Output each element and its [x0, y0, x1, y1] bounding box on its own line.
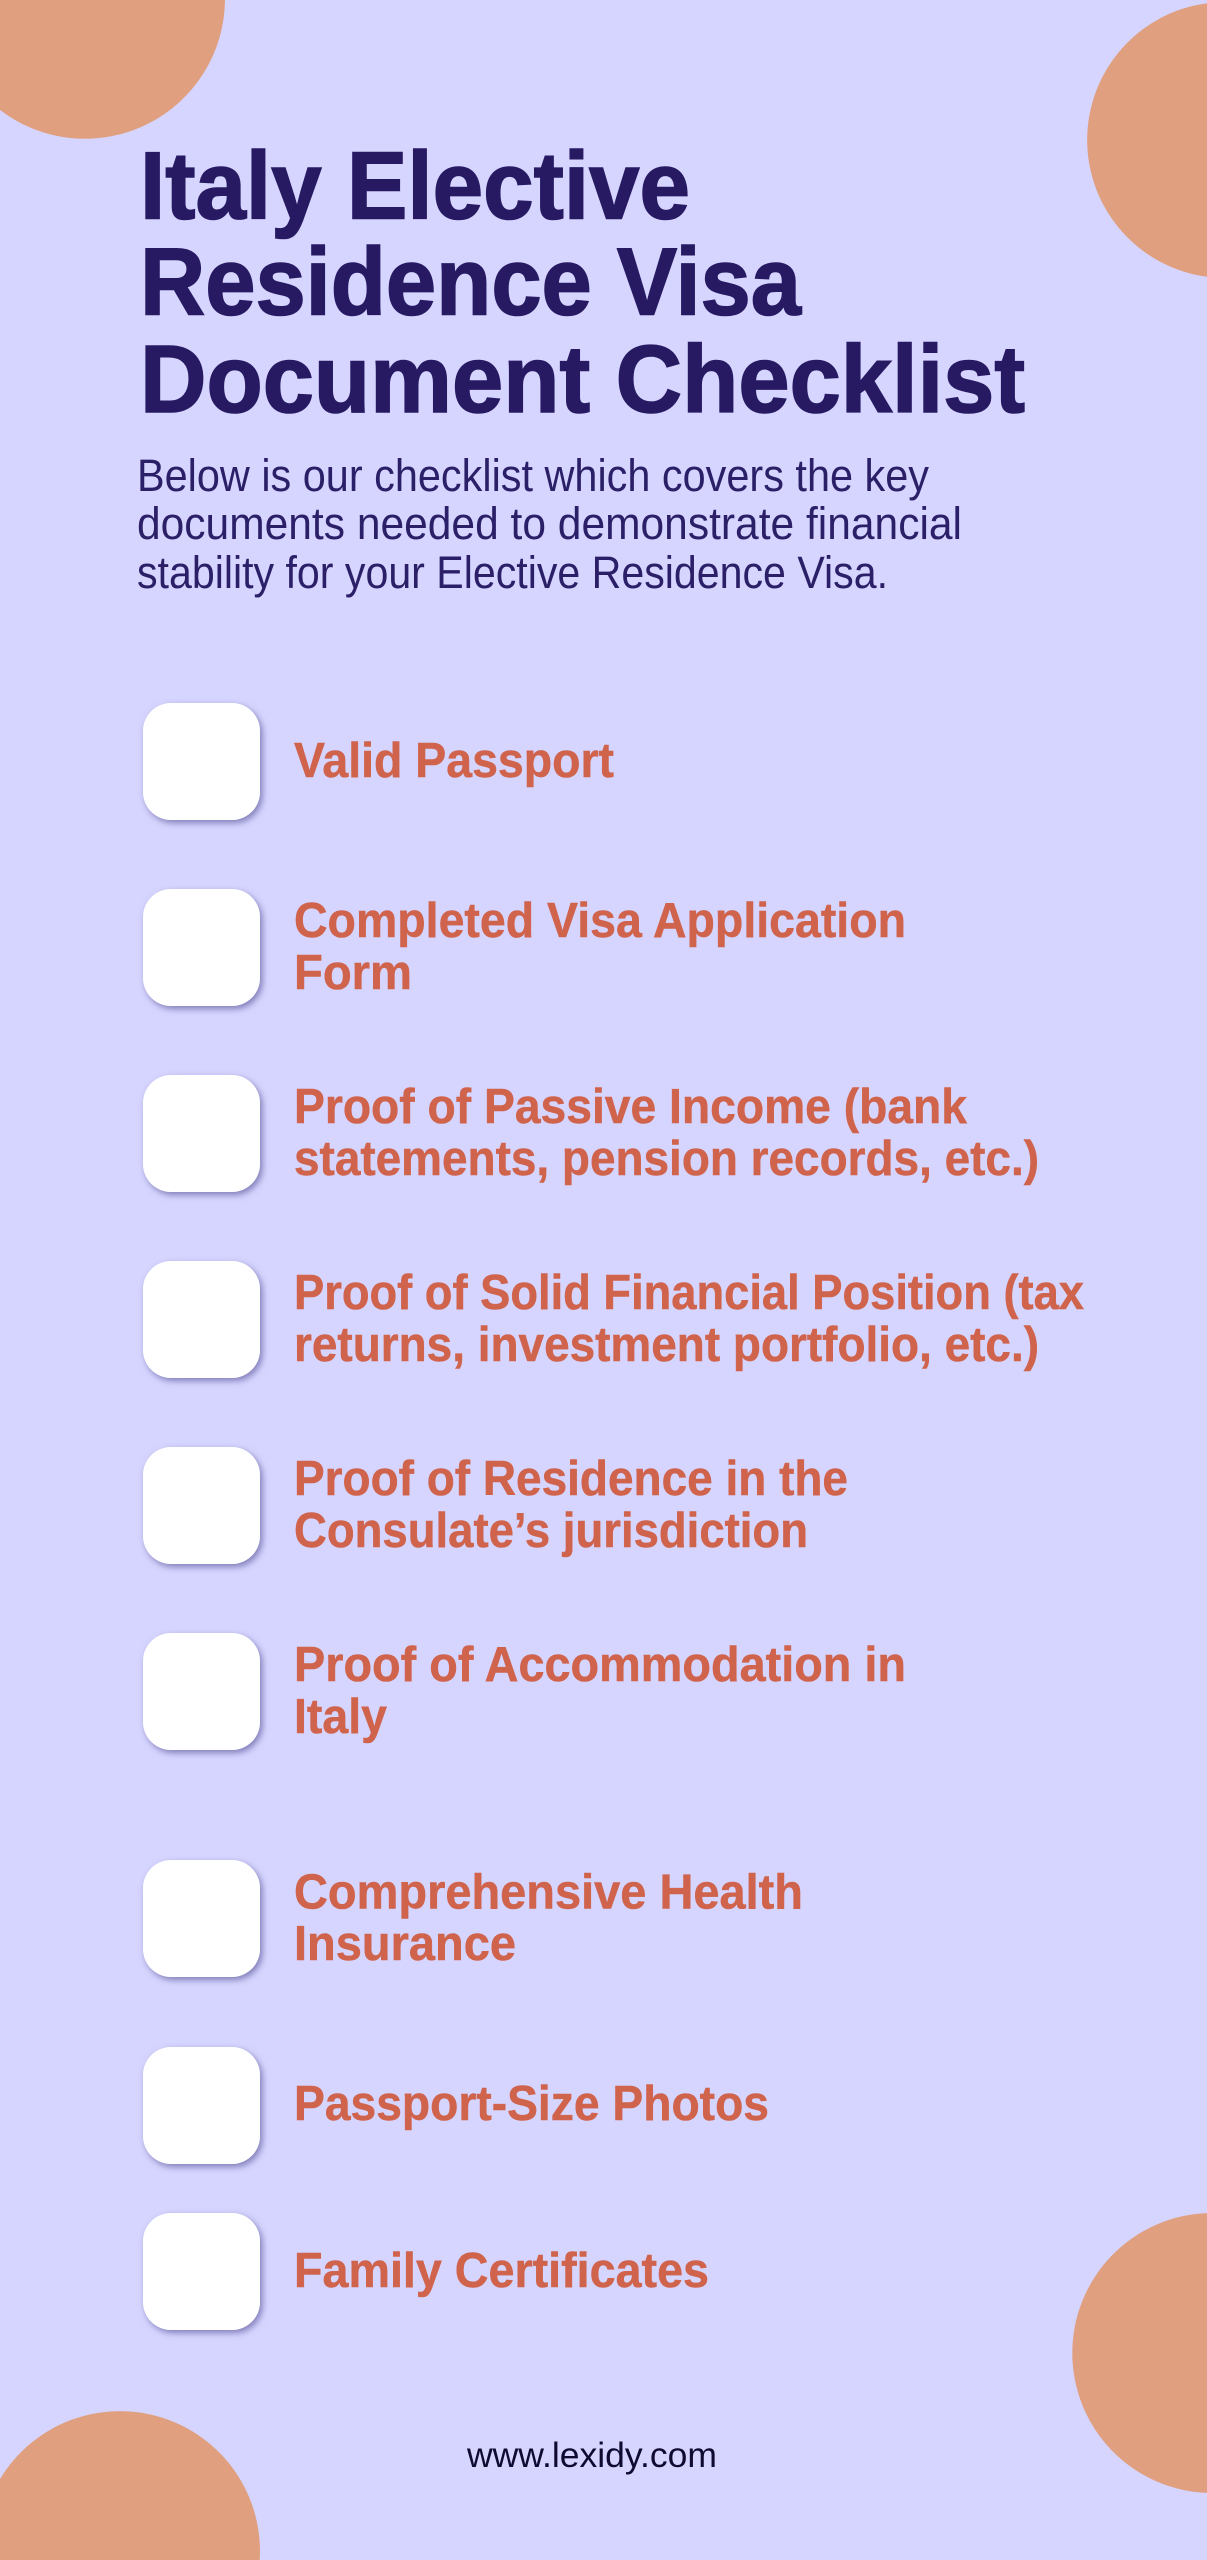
checkbox — [143, 2047, 260, 2164]
item label: returns, investment portfolio, etc.) — [294, 1318, 1039, 1372]
item label: Proof of Accommodation in — [294, 1638, 906, 1692]
title — [140, 132, 1025, 433]
item label: statements, pension records, etc.) — [294, 1132, 1039, 1186]
checkbox — [143, 1261, 260, 1378]
checkbox — [143, 1633, 260, 1750]
title: Italy Elective — [140, 132, 690, 240]
item label — [294, 1638, 906, 1744]
checklist item: health insurance — [143, 1860, 803, 1977]
checklist item: accommodation — [143, 1633, 906, 1750]
item label — [294, 894, 906, 1000]
item label: Insurance — [294, 1917, 516, 1971]
title: Document Checklist — [140, 326, 1025, 433]
checklist item: photos — [143, 2047, 769, 2164]
checklist item: family certificates — [143, 2213, 709, 2330]
item label: Family Certificates — [294, 2244, 709, 2298]
item label: Proof of Passive Income (bank — [294, 1080, 968, 1134]
checklist item: visa application form — [143, 889, 906, 1006]
item label: Form — [294, 946, 412, 1000]
checkbox — [143, 1447, 260, 1564]
item label: Valid Passport — [294, 734, 614, 788]
item label: Proof of Residence in the — [294, 1452, 848, 1506]
title: Residence Visa — [140, 228, 802, 336]
item label — [294, 1866, 803, 1971]
item label — [294, 1080, 1039, 1186]
decorative circle: top right — [1087, 3, 1207, 277]
checkbox — [143, 1075, 260, 1192]
checklist item: valid passport — [143, 703, 614, 820]
checkbox — [143, 703, 260, 820]
intro text — [137, 450, 962, 598]
checkbox — [143, 2213, 260, 2330]
item label: Italy — [294, 1690, 387, 1744]
intro text: documents needed to demonstrate financial — [137, 498, 962, 549]
decorative circle: bottom left — [0, 2411, 260, 2560]
item label: Passport-Size Photos — [294, 2077, 769, 2131]
item label: Consulate’s jurisdiction — [294, 1504, 808, 1558]
decorative circle: bottom right — [1072, 2213, 1207, 2493]
checklist item: residence — [143, 1447, 848, 1564]
footer url: www.lexidy.com — [466, 2436, 717, 2475]
checklist item: passive income — [143, 1075, 1039, 1192]
item label — [294, 1266, 1084, 1372]
item label: Completed Visa Application — [294, 894, 906, 948]
item label: Proof of Solid Financial Position (tax — [294, 1266, 1084, 1320]
checkbox — [143, 889, 260, 1006]
intro text: Below is our checklist which covers the key — [137, 450, 929, 501]
item label: Comprehensive Health — [294, 1866, 803, 1920]
decorative circle: top left — [0, 0, 225, 139]
intro text: stability for your Elective Residence Visa. — [137, 547, 888, 598]
item label — [294, 1452, 848, 1558]
checkbox — [143, 1860, 260, 1977]
checklist item: financial position — [143, 1261, 1084, 1378]
